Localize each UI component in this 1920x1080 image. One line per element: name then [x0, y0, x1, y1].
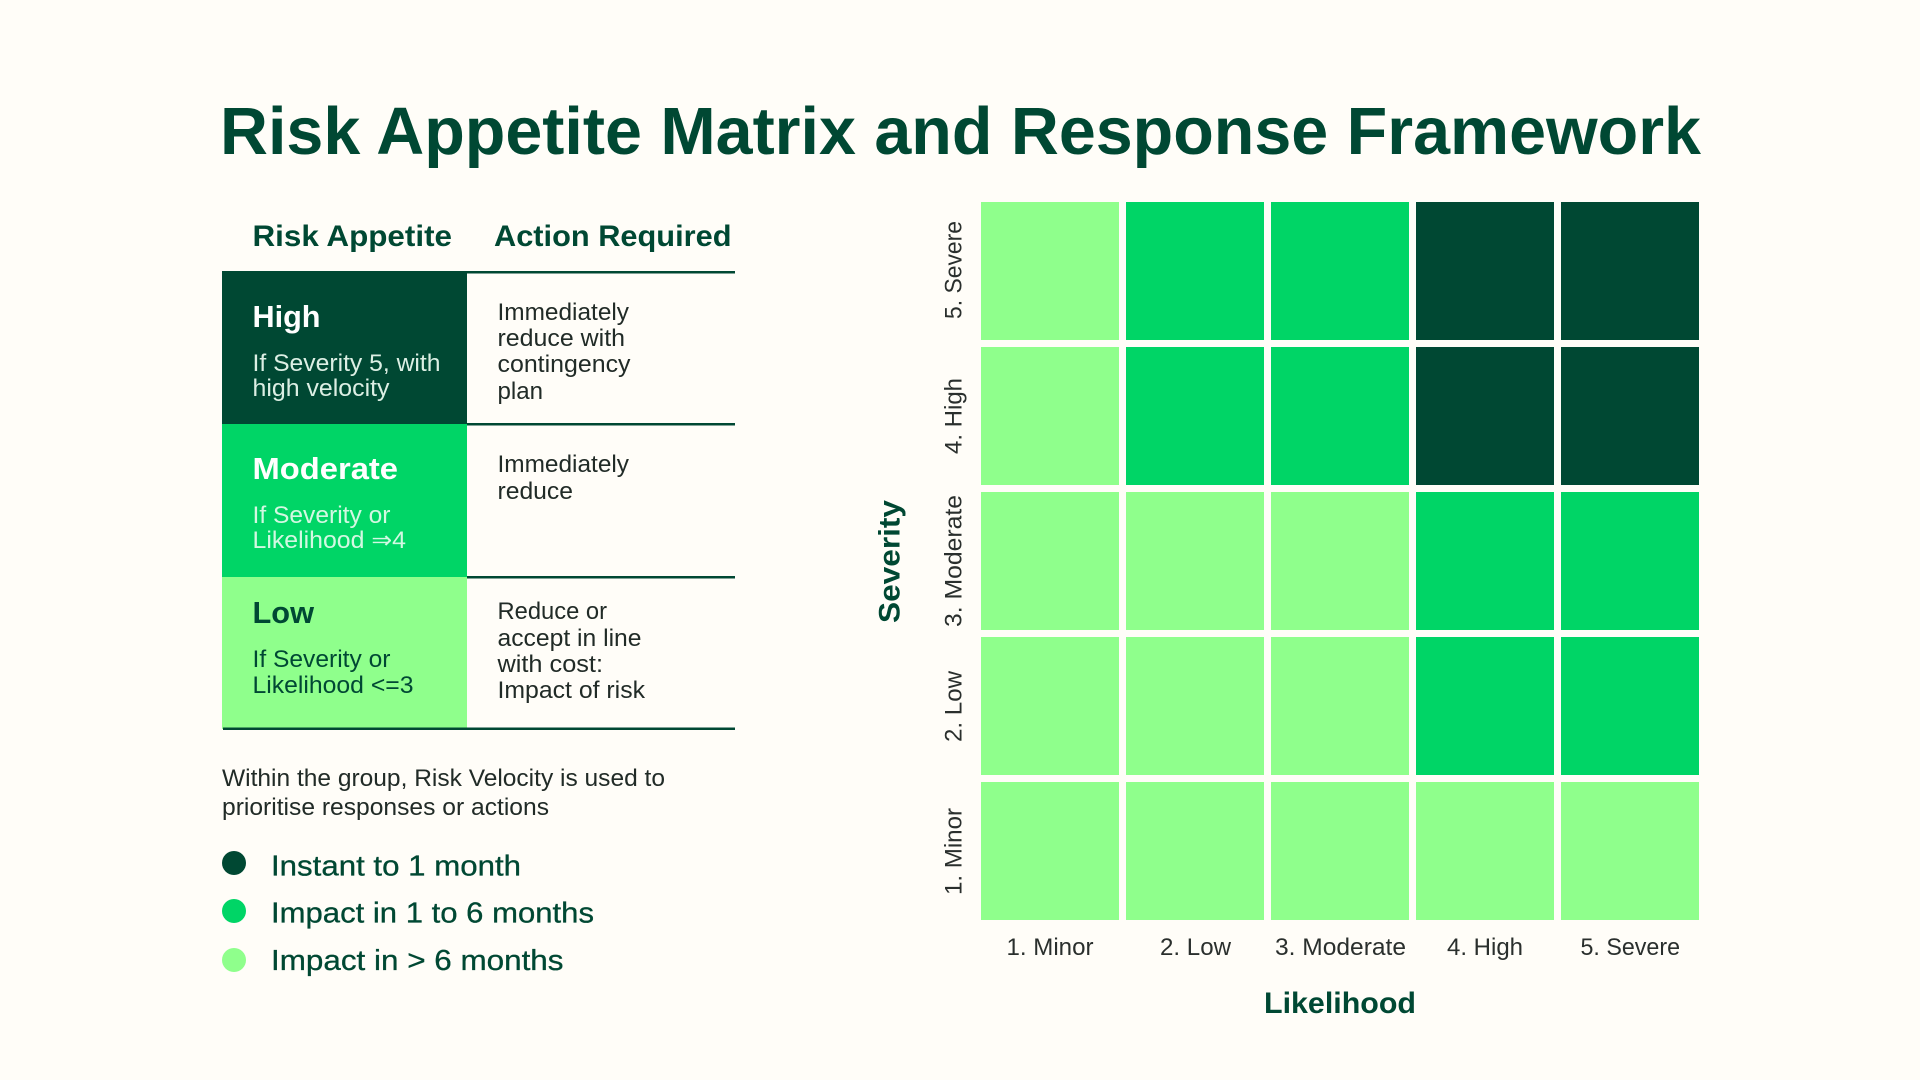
x axis labels: likelihood levels: 1. Minor — [1006, 934, 1094, 961]
row: moderate appetite: reduce — [498, 478, 573, 505]
x axis labels: likelihood levels: 4. High — [1447, 934, 1523, 961]
row: high appetite: reduce with — [498, 325, 625, 352]
x axis labels: likelihood levels: 5. Severe — [1580, 934, 1680, 961]
legend item: impact in over 6 months: Impact in > 6 months — [271, 945, 564, 977]
row: high appetite: high velocity — [252, 375, 390, 402]
x axis labels: likelihood levels: 3. Moderate — [1275, 934, 1406, 961]
table heading: risk appetite: Risk Appetite — [252, 220, 452, 253]
text block: risk velocity note — [222, 765, 665, 821]
x axis labels: likelihood levels: 2. Low — [1160, 934, 1232, 961]
title: Risk Appetite Matrix and Response Framework — [220, 94, 1702, 169]
row: low appetite: accept in line — [498, 625, 642, 652]
row: moderate appetite: If Severity or — [252, 502, 390, 529]
y axis labels: severity levels: 5. Severe — [940, 221, 968, 319]
row: low appetite — [222, 576, 735, 730]
legend item: impact in 1 to 6 months: Impact in 1 to 6 months — [271, 898, 594, 930]
table heading: action required: Action Required — [494, 220, 732, 253]
row: low appetite: Impact of risk — [498, 677, 646, 704]
y axis labels: severity levels: 1. Minor — [940, 808, 968, 895]
row: high appetite: Immediately — [498, 299, 629, 326]
x axis labels: likelihood levels — [1006, 934, 1680, 961]
heatmap: severity by likelihood — [981, 202, 1699, 920]
row: low appetite: Reduce or — [498, 598, 607, 625]
row: moderate appetite: Likelihood ⇒4 — [252, 527, 406, 554]
y axis labels: severity levels: 4. High — [940, 378, 968, 454]
row: moderate appetite: Moderate — [252, 451, 398, 486]
y axis labels: severity levels: 3. Moderate — [940, 495, 968, 627]
legend item: instant to 1 month: Instant to 1 month — [271, 850, 521, 882]
row: low appetite: If Severity or — [252, 646, 390, 673]
y axis labels: severity levels: 2. Low — [940, 670, 968, 742]
row: high appetite — [222, 271, 735, 425]
row: high appetite: If Severity 5, with — [252, 350, 440, 377]
row: high appetite: contingency — [498, 351, 630, 378]
row: low appetite: Low — [252, 595, 315, 630]
text block: risk velocity note: Within the group, Risk Velocity is used to — [222, 765, 665, 792]
panel: risk appetite table — [222, 220, 735, 730]
text block: risk velocity note: prioritise responses or actions — [222, 794, 549, 821]
legend: risk velocity — [222, 850, 594, 977]
row: high appetite: High — [252, 299, 320, 334]
row: moderate appetite — [222, 423, 735, 577]
y axis title: severity: Severity — [874, 500, 906, 623]
y axis labels: severity levels — [940, 221, 968, 895]
x axis title: likelihood: Likelihood — [1264, 987, 1416, 1020]
row: moderate appetite: Immediately — [498, 451, 629, 478]
row: low appetite: with cost: — [496, 651, 603, 678]
row: low appetite: Likelihood <=3 — [252, 672, 414, 699]
row: high appetite: plan — [498, 378, 543, 405]
